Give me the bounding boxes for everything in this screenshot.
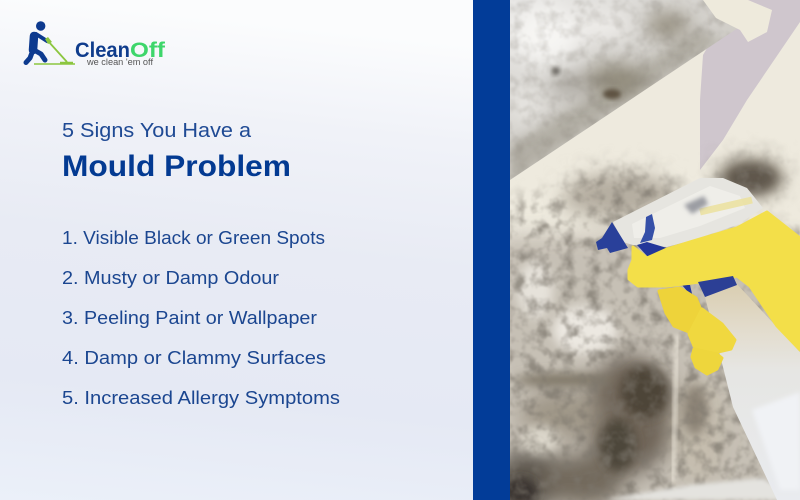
logo wordmark: Off	[130, 39, 166, 62]
yellow glove	[629, 212, 800, 374]
blue trigger	[637, 242, 667, 257]
sign 2: 2. Musty or Damp Odour	[62, 268, 279, 288]
peeled paper tab	[703, 0, 772, 42]
finger two	[659, 288, 701, 332]
spray bottle label panel	[754, 394, 800, 478]
wall	[510, 22, 800, 240]
blue nozzle	[596, 222, 628, 253]
list of five signs	[62, 228, 340, 408]
blue divider bar	[473, 0, 510, 500]
heading line 2: Mould Problem	[62, 150, 291, 183]
logo wordmark	[75, 39, 166, 62]
peeled wallpaper flap	[509, 0, 740, 180]
heading line 1: 5 Signs You Have a	[62, 120, 252, 142]
finger three	[689, 309, 735, 352]
baseboard	[603, 478, 800, 500]
glove back of hand	[629, 212, 800, 350]
spray bottle body	[705, 283, 800, 500]
sign 3: 3. Peeling Paint or Wallpaper	[62, 308, 317, 328]
left panel background	[0, 0, 473, 500]
finger four	[692, 349, 722, 374]
mauve exposed wall	[700, 0, 800, 170]
sign 5: 5. Increased Allergy Symptoms	[62, 388, 340, 408]
icon: person mopping	[26, 21, 75, 64]
sign 1: 1. Visible Black or Green Spots	[62, 228, 325, 248]
photo: gloved hand spraying mouldy wall	[490, 0, 800, 500]
inner blue tube	[640, 214, 655, 243]
sign 4: 4. Damp or Clammy Surfaces	[62, 348, 326, 368]
logo wordmark: Clean	[75, 39, 130, 62]
blue bottle collar	[698, 276, 737, 297]
spray head	[596, 178, 763, 298]
mould on lower wall	[510, 142, 800, 500]
crease on the wall	[673, 335, 677, 482]
logo: CleanOff	[26, 21, 166, 67]
logo tagline: we clean 'em off	[86, 57, 154, 67]
heading	[62, 120, 291, 183]
